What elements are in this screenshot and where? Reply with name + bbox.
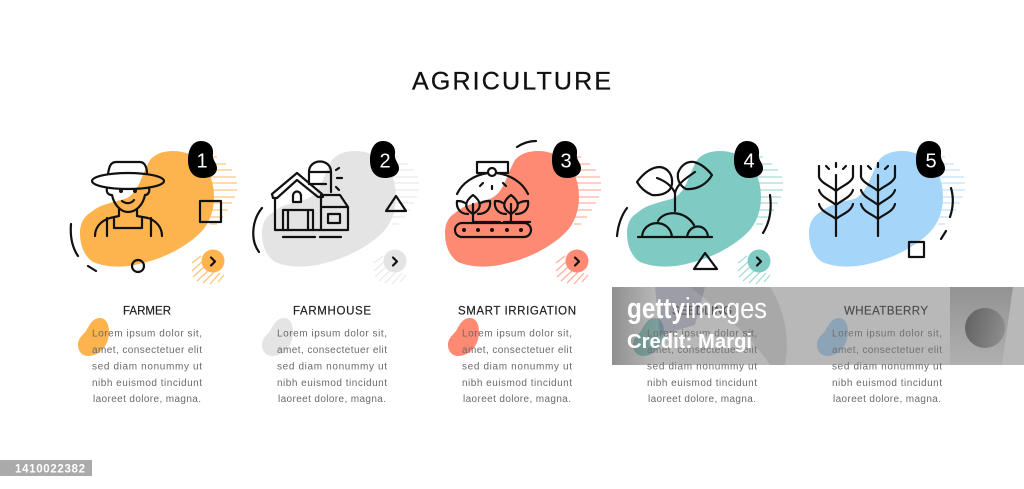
small blob: irrigation xyxy=(448,318,479,356)
shape: triangle xyxy=(694,253,717,269)
column 1 text xyxy=(78,306,202,405)
icon: seedling xyxy=(637,162,712,237)
shape: triangle xyxy=(386,196,406,211)
watermark band xyxy=(612,287,1024,365)
body text: irrigation: Lorem ipsum dolor sit, xyxy=(462,328,572,340)
body text: irrigation: sed diam nonummy ut xyxy=(462,362,572,372)
shape: small circle xyxy=(132,260,144,272)
decorative stripes: farmhouse xyxy=(374,157,419,284)
blob: wheatberry xyxy=(809,151,943,267)
icon: farmhouse xyxy=(272,162,348,237)
body text: wheatberry xyxy=(832,328,942,405)
icon: smart irrigation xyxy=(455,162,531,237)
number badge 3 xyxy=(552,141,581,178)
column 2 text xyxy=(262,306,387,405)
body text: irrigation: laoreet dolore, magna. xyxy=(463,394,571,405)
body text: seedling: laoreet dolore, magna. xyxy=(648,394,756,405)
heading: wheatberry: WHEATBERRY xyxy=(844,306,928,318)
heading: farmhouse: FARMHOUSE xyxy=(293,306,371,318)
blob: seedling xyxy=(627,151,761,267)
number badge 3: 3 xyxy=(560,150,572,172)
number badge 4: 4 xyxy=(743,150,755,172)
body text: irrigation: amet, consectetuer elit xyxy=(462,345,572,356)
arrow button: seedling xyxy=(748,250,770,272)
body text: farmhouse: nibh euismod tincidunt xyxy=(277,378,387,389)
small blob: wheatberry xyxy=(817,318,848,356)
watermark credit: Credit: Margi xyxy=(627,331,752,353)
decorative stripes: seedling xyxy=(738,157,783,284)
body text: irrigation: nibh euismod tincidunt xyxy=(462,378,572,389)
body text: seedling: amet, consectetuer elit xyxy=(647,345,757,356)
body text: farmer: amet, consectetuer elit xyxy=(92,345,202,356)
number badge 1: 1 xyxy=(196,150,208,172)
decorative stripes: wheatberry xyxy=(938,157,965,224)
arrow button: farmer xyxy=(202,250,224,272)
image id tag xyxy=(0,460,92,476)
body text: seedling: sed diam nonummy ut xyxy=(647,362,757,372)
number badge 2 xyxy=(370,141,399,178)
decorative stripes: farmer xyxy=(192,157,237,284)
heading: smart irrigation: SMART IRRIGATION xyxy=(458,306,576,318)
body text: farmhouse: laoreet dolore, magna. xyxy=(278,394,386,405)
watermark logo: images xyxy=(685,293,767,325)
number badge 1 xyxy=(188,141,217,178)
blob: farmer xyxy=(80,151,214,267)
icon: farmer xyxy=(92,162,164,236)
number badge 2: 2 xyxy=(379,150,391,172)
body text: seedling: Lorem ipsum dolor sit, xyxy=(647,328,757,340)
number badge 5 xyxy=(916,141,945,178)
heading: farmer: FARMER xyxy=(123,306,171,318)
arrow button: irrigation xyxy=(566,250,588,272)
decorative stripes: irrigation xyxy=(556,157,601,284)
heading: seedling: SEEDLING xyxy=(672,306,732,318)
small blob: farmhouse xyxy=(262,318,293,356)
small blob: farmer xyxy=(78,318,109,356)
body text: farmhouse xyxy=(277,328,387,405)
number badge 4 xyxy=(734,141,763,178)
body text: farmer: sed diam nonummy ut xyxy=(92,362,202,372)
blob: farmhouse xyxy=(262,151,396,267)
body text: farmer: Lorem ipsum dolor sit, xyxy=(92,328,202,340)
decorative arcs: farmer xyxy=(71,224,96,271)
decorative arc: farmhouse xyxy=(253,208,262,252)
column 3 text xyxy=(448,306,576,405)
panel: farmhouse xyxy=(253,141,419,284)
shape: square xyxy=(200,201,221,222)
body text: farmer: laoreet dolore, magna. xyxy=(93,394,201,405)
body text: farmer: nibh euismod tincidunt xyxy=(92,378,202,389)
title: AGRICULTURE xyxy=(412,68,611,96)
body text: wheatberry: laoreet dolore, magna. xyxy=(833,394,941,405)
arrow button: farmhouse xyxy=(384,250,406,272)
watermark logo xyxy=(627,293,767,325)
number badge 5: 5 xyxy=(925,150,937,172)
decorative arcs: seedling xyxy=(617,195,771,236)
body text: wheatberry: amet, consectetuer elit xyxy=(832,345,942,356)
panel: seedling xyxy=(617,141,783,284)
body text: farmhouse: amet, consectetuer elit xyxy=(277,345,387,356)
icon: wheat right xyxy=(861,163,895,236)
panel: smart irrigation xyxy=(445,141,601,284)
body text: farmer xyxy=(92,328,202,405)
column 5 text xyxy=(817,306,942,405)
body text: farmhouse: Lorem ipsum dolor sit, xyxy=(277,328,387,340)
decorative arcs: wheatberry xyxy=(941,188,953,239)
body text: irrigation xyxy=(462,328,572,405)
panel: farmer xyxy=(71,141,237,284)
decorative arc: irrigation xyxy=(517,141,536,147)
blob: irrigation xyxy=(445,151,579,267)
body text: wheatberry: Lorem ipsum dolor sit, xyxy=(832,328,942,340)
body text: wheatberry: nibh euismod tincidunt xyxy=(832,378,942,389)
icon: wheat left xyxy=(819,163,853,236)
image id tag: 1410022382 xyxy=(15,464,85,476)
watermark logo: getty xyxy=(627,293,685,325)
body text: wheatberry: sed diam nonummy ut xyxy=(832,362,942,372)
body text: seedling xyxy=(647,328,757,405)
body text: farmhouse: sed diam nonummy ut xyxy=(277,362,387,372)
body text: seedling: nibh euismod tincidunt xyxy=(647,378,757,389)
small blob: seedling xyxy=(633,318,664,356)
column 4 text xyxy=(633,306,757,405)
panel: wheatberry xyxy=(809,141,965,267)
shape: square xyxy=(909,242,924,257)
